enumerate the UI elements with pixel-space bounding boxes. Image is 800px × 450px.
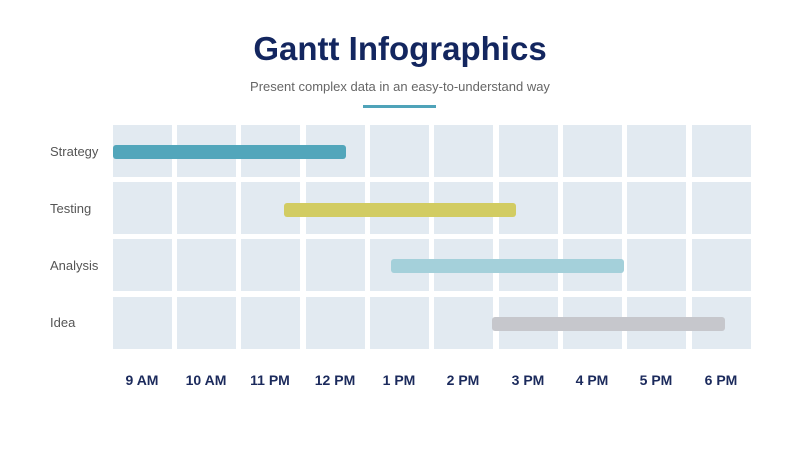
title: Gantt Infographics	[253, 30, 547, 67]
time axis labels: 2 PM	[447, 372, 479, 388]
time axis labels: 12 PM	[315, 372, 355, 388]
label: Idea: Idea	[50, 315, 75, 330]
bar: idea	[492, 317, 725, 331]
label: Analysis: Analysis	[50, 258, 98, 273]
time axis labels: 9 AM	[126, 372, 158, 388]
time axis labels: 1 PM	[383, 372, 415, 388]
accent underline	[363, 105, 436, 108]
bar: strategy	[113, 145, 346, 159]
time axis labels: 4 PM	[576, 372, 608, 388]
subtitle: Present complex data in an easy-to-understand way	[250, 79, 550, 94]
time axis labels: 11 PM	[250, 372, 290, 388]
bar: analysis	[391, 259, 624, 273]
label: Strategy: Strategy	[50, 144, 98, 159]
time axis labels: 3 PM	[512, 372, 544, 388]
time axis labels: 5 PM	[640, 372, 672, 388]
time axis labels: 6 PM	[705, 372, 737, 388]
label: Testing: Testing	[50, 201, 91, 216]
time axis labels: 10 AM	[186, 372, 226, 388]
time axis labels	[126, 372, 737, 388]
bar: testing	[284, 203, 516, 217]
